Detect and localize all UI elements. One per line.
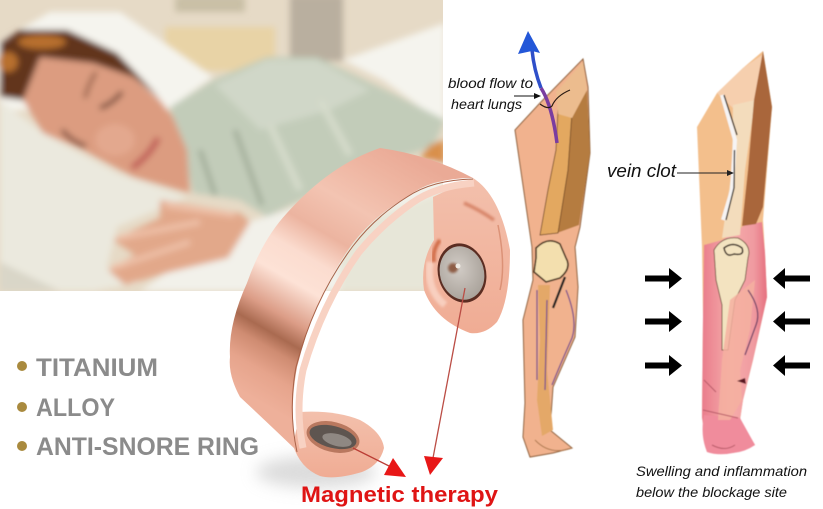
bullet and label: alloy: ALLOY: [36, 394, 115, 422]
thigh hip top: [717, 55, 762, 110]
white vein: [722, 95, 735, 220]
bullet and label: titanium: TITANIUM: [36, 354, 158, 382]
thigh bone: [540, 110, 572, 235]
list: ring features: [17, 354, 259, 461]
arrows: swelling, pointing right: [645, 268, 682, 376]
lower leg bones: [537, 285, 553, 436]
ring: outer band: [230, 148, 474, 452]
ring: bottom inner end with magnet: [293, 412, 384, 477]
hip outline curve: [540, 90, 570, 108]
caption: swelling and inflammation: Swelling and inflammation: [636, 463, 807, 479]
caption: swelling and inflammation: below the blockage site: [636, 484, 787, 500]
arrows: swelling, pointing left: [773, 268, 810, 376]
swollen leg outline: [697, 51, 772, 453]
label: magnetic therapy: Magnetic therapy: [301, 482, 499, 507]
illustration: blocked leg anatomy: [697, 51, 772, 454]
arrow: blood flow pointer: [514, 93, 541, 99]
knee joint: [534, 241, 568, 282]
clot outline: [724, 95, 737, 220]
swollen lower leg: [702, 222, 767, 453]
arrow: blue blood flow: [518, 31, 557, 143]
caption: swelling and inflammation: [636, 463, 807, 500]
label: blood flow to heart lungs: heart lungs: [451, 96, 522, 112]
bullet and label: anti-snore ring: ANTI-SNORE RING: [36, 433, 259, 461]
calf vein: [745, 290, 758, 355]
arrow: lower magnet to label: [353, 448, 406, 477]
ring shadow: [256, 456, 376, 488]
label: blood flow to heart lungs: blood flow to: [448, 75, 533, 91]
knee joint: [714, 238, 749, 350]
knee ligament: [553, 277, 565, 308]
label: blood flow to heart lungs: [448, 75, 533, 112]
thigh bone: [722, 100, 755, 238]
ring: right inner end with magnet: [423, 178, 510, 333]
illustration: healthy leg anatomy: [515, 59, 590, 457]
arrow: vein clot pointer: [677, 170, 734, 176]
label: vein clot: vein clot: [607, 160, 677, 181]
leg outline skin: [515, 59, 590, 457]
lower leg inner tissue: [718, 280, 755, 420]
lower leg veins: [537, 290, 574, 390]
foot toes: [535, 440, 572, 451]
thigh muscle: [742, 51, 772, 226]
foot: [703, 415, 755, 454]
thigh muscle: [557, 90, 590, 233]
clot marker: [737, 378, 746, 384]
photo: woman sleeping in bed: [0, 0, 445, 291]
hip bone head: [556, 62, 587, 118]
rose-gold magnetic ring: [230, 148, 510, 477]
foot folds: [703, 380, 738, 448]
arrow: upper magnet to label: [424, 288, 465, 475]
